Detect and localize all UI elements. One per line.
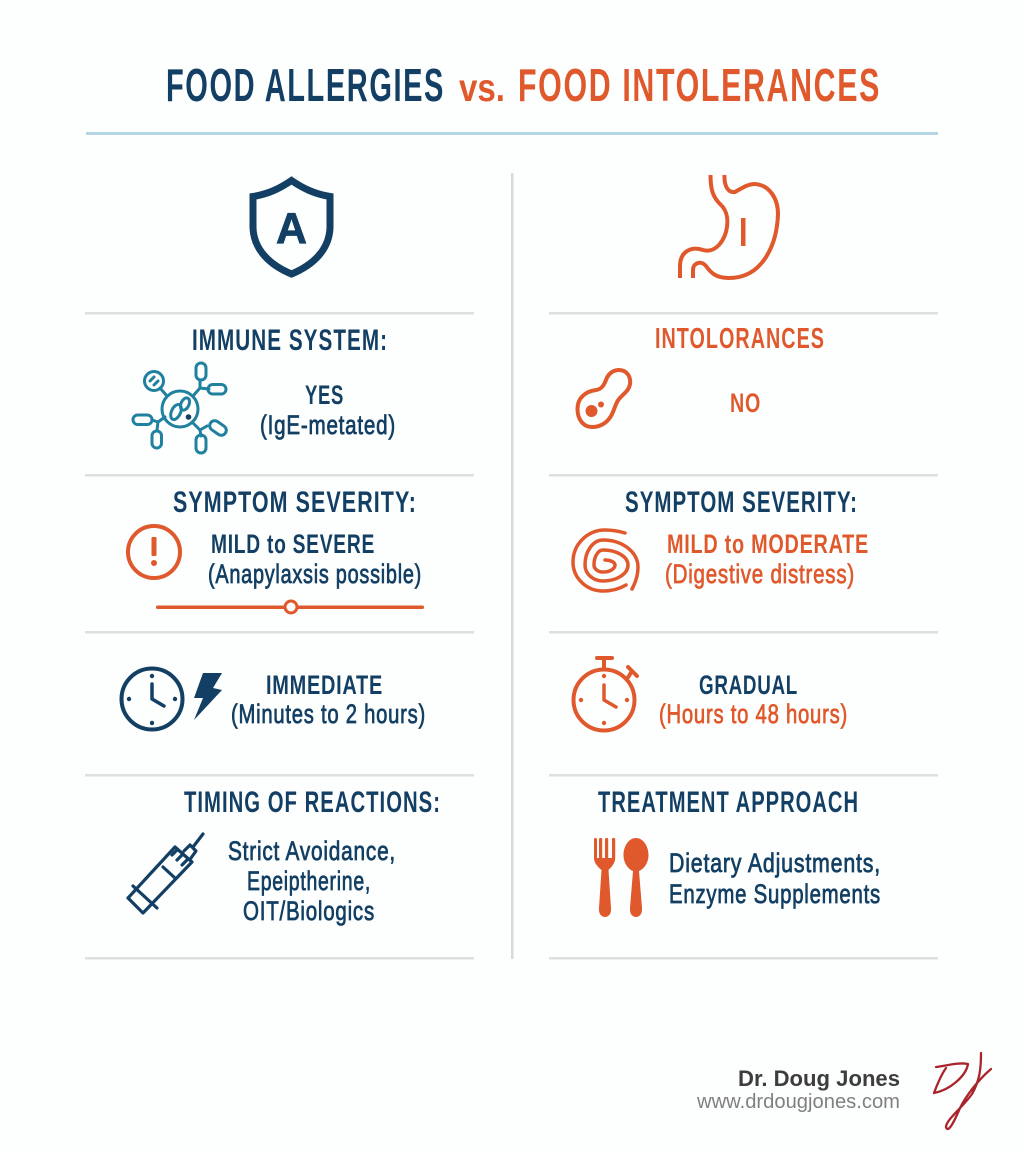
text: treatment left: Strict Avoidance, xyxy=(228,836,396,866)
footer credit: www.drdougjones.com xyxy=(696,1091,900,1113)
title xyxy=(166,59,881,111)
panel: immediate xyxy=(122,668,426,730)
heading: symptom severity: SYMPTOM SEVERITY: xyxy=(625,486,858,519)
icon: clock xyxy=(122,668,182,730)
panel: timing of reactions xyxy=(128,786,441,926)
footer credit: Dr. Doug Jones xyxy=(738,1066,900,1091)
icon: syringe xyxy=(128,834,203,913)
icon: stopwatch xyxy=(574,658,637,730)
text: digestive distress: (Digestive distress) xyxy=(665,559,855,589)
heading: timing of reactions: TIMING OF REACTIONS: xyxy=(184,786,441,819)
icon: alert xyxy=(128,526,180,578)
heading: intolorances: INTOLORANCES xyxy=(655,323,825,355)
heading: immune system: IMMUNE SYSTEM: xyxy=(192,324,388,357)
panel: gradual xyxy=(574,658,848,730)
text: treatment left xyxy=(228,836,396,926)
icon: cell xyxy=(578,370,630,427)
signature xyxy=(934,1053,991,1129)
icon: immune cell xyxy=(133,363,228,453)
text: gradual: GRADUAL xyxy=(699,670,798,700)
text: hours to 48 hours: (Hours to 48 hours) xyxy=(659,699,848,729)
panel: immune system, allergies xyxy=(133,324,396,453)
text: mild to severe: MILD to SEVERE xyxy=(211,529,375,559)
text: treatment right xyxy=(669,848,881,909)
text: minutes to 2 hours: (Minutes to 2 hours) xyxy=(231,699,426,729)
icon: fork and spoon xyxy=(594,838,648,917)
icon: shield with A: A xyxy=(276,204,307,253)
text: immediate: IMMEDIATE xyxy=(266,670,383,700)
heading: treatment approach: TREATMENT APPROACH xyxy=(598,786,859,819)
icon: spiral xyxy=(573,530,638,591)
panel: treatment approach xyxy=(594,786,881,917)
severity slider xyxy=(156,601,424,613)
footer credit xyxy=(696,1066,900,1113)
text: IgE-metated: (IgE-metated) xyxy=(260,410,396,440)
text: anaphylaxis: (Anapylaxsis possible) xyxy=(208,559,422,589)
text: treatment right: Enzyme Supplements xyxy=(669,879,881,909)
panel: symptom severity, allergies xyxy=(128,486,424,613)
text: treatment left: OIT/Biologics xyxy=(243,896,375,926)
panel: intolerances xyxy=(578,323,825,427)
text: no: NO xyxy=(730,388,761,418)
icon: shield with A xyxy=(253,180,330,274)
text: treatment right: Dietary Adjustments, xyxy=(669,848,881,878)
text: mild to moderate: MILD to MODERATE xyxy=(667,529,869,559)
title: FOOD ALLERGIES xyxy=(166,59,445,111)
icon: lightning bolt xyxy=(194,673,222,720)
text: treatment left: Epeiptherine, xyxy=(247,866,371,896)
icon: stomach xyxy=(680,175,778,278)
text: yes: YES xyxy=(305,380,344,410)
panel: symptom severity, intolerances xyxy=(573,486,869,591)
heading: symptom severity: SYMPTOM SEVERITY: xyxy=(173,486,417,519)
title: vs. xyxy=(459,67,505,110)
